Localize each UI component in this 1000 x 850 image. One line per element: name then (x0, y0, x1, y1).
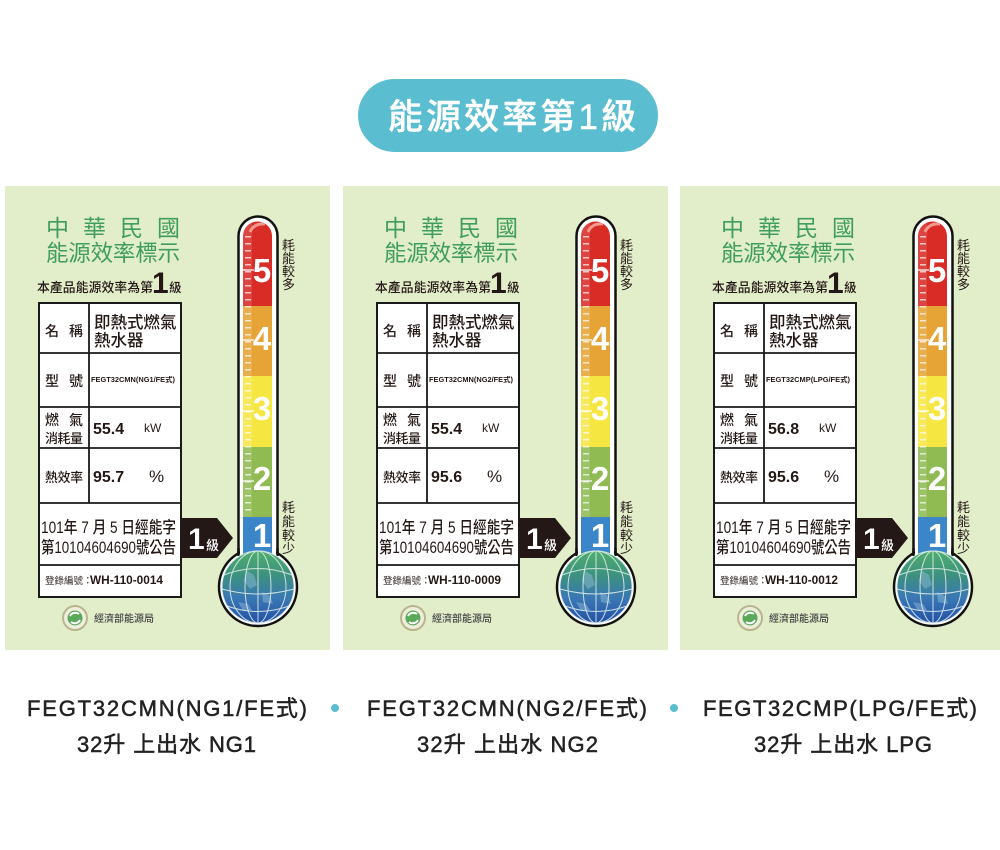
spec table: 熱效率 (45, 470, 83, 485)
grade statement: 1 (152, 267, 169, 300)
spec table: % (149, 467, 164, 486)
label heading: 中 華 民 國 (46, 215, 180, 241)
label heading: 能源效率標示 (721, 241, 855, 266)
issuer logo: 經濟部能源局 (432, 612, 492, 625)
caption: LPG (703, 696, 977, 757)
issuer logo: 經濟部能源局 (94, 612, 154, 625)
scale label: low consumption: 耗 (282, 500, 295, 515)
panel: label NG2 (343, 186, 668, 650)
scale label: low consumption: 較 (957, 528, 970, 543)
grade arrow: 1 (863, 523, 880, 556)
spec table: 101年 7 月 5 日經能字 (716, 518, 851, 537)
spec table: 第10104604690號公告 (41, 538, 176, 557)
thermometer: 4 (591, 320, 610, 357)
label heading: 中 華 民 國 (721, 215, 855, 241)
label heading (721, 215, 855, 266)
spec table: FEGT32CMN(NG2/FE式) (429, 375, 513, 384)
scale label: high consumption (957, 238, 970, 292)
spec table: 熱水器 (769, 331, 818, 350)
spec table: kW (144, 421, 162, 435)
scale label: low consumption: 少 (282, 541, 295, 556)
caption: NG1 (27, 696, 307, 757)
spec table: 101年 7 月 5 日經能字 (41, 518, 176, 537)
spec table: 名 稱 (383, 323, 421, 339)
scale label: high consumption: 耗 (620, 238, 633, 253)
issuer logo (401, 606, 492, 630)
thermometer: 3 (591, 390, 609, 427)
spec table: 燃 氣 (720, 412, 758, 428)
title pill (358, 79, 658, 152)
spec table: 型 號 (720, 373, 758, 389)
scale label: high consumption: 耗 (957, 238, 970, 253)
spec table: 登錄編號： (720, 575, 768, 587)
spec table: 第10104604690號公告 (716, 538, 851, 557)
label heading: 中 華 民 國 (384, 215, 518, 241)
grade statement: 本產品能源效率為第 (375, 280, 491, 295)
spec table: WH-110-0012 (765, 574, 838, 587)
caption: LPG: FEGT32CMP(LPG/FE式) (703, 696, 977, 721)
grade statement: 級 (169, 280, 182, 295)
thermometer: 1 (591, 517, 609, 554)
spec table: % (487, 467, 502, 486)
thermometer (557, 216, 635, 626)
grade arrow (181, 518, 233, 558)
spec table: 95.7 (93, 469, 124, 486)
spec table: WH-110-0009 (428, 574, 502, 587)
spec table: 燃 氣 (383, 412, 421, 428)
scale label: low consumption: 能 (282, 514, 295, 529)
spec table (39, 303, 181, 597)
label heading: 能源效率標示 (46, 241, 180, 266)
scale label: low consumption: 耗 (957, 500, 970, 515)
scale label: high consumption: 多 (957, 277, 970, 292)
grade arrow (519, 518, 571, 558)
spec table: 消耗量 (45, 431, 83, 446)
title pill: 能源效率第1級 (388, 98, 636, 137)
grade arrow: 級 (206, 538, 219, 553)
spec table: % (824, 467, 839, 486)
scale label: low consumption: 較 (620, 528, 633, 543)
grade arrow: 1 (526, 523, 543, 556)
issuer logo (63, 606, 154, 630)
grade arrow: 級 (544, 538, 557, 553)
label heading (384, 215, 518, 266)
grade statement: 1 (490, 267, 507, 300)
spec table: 95.6 (431, 469, 462, 486)
spec table: 95.6 (768, 469, 799, 486)
separator dot (331, 704, 339, 712)
spec table: kW (819, 421, 837, 435)
label heading: 能源效率標示 (384, 241, 518, 266)
spec table: 55.4 (93, 421, 124, 438)
spec table: 燃 氣 (45, 412, 83, 428)
thermometer: 2 (928, 460, 946, 497)
thermometer: 3 (928, 390, 946, 427)
grade arrow (856, 518, 908, 558)
spec table: 熱效率 (720, 470, 758, 485)
separator dot (670, 704, 678, 712)
thermometer: 5 (253, 252, 271, 289)
spec table: 熱水器 (94, 331, 144, 350)
panel: label NG1 (5, 186, 330, 650)
spec table: 即熱式燃氣 (769, 313, 852, 332)
scale label: low consumption: 能 (620, 514, 633, 529)
spec table: 第10104604690號公告 (379, 538, 514, 557)
thermometer: 1 (253, 517, 271, 554)
grade statement: 級 (507, 280, 520, 295)
issuer logo: 經濟部能源局 (769, 612, 829, 625)
scale label: low consumption: 較 (282, 528, 295, 543)
thermometer (894, 216, 972, 626)
thermometer: 5 (591, 252, 609, 289)
scale label: low consumption: 少 (620, 541, 633, 556)
scale label: high consumption: 能 (620, 251, 633, 266)
caption: NG1: 32升 上出水 NG1 (77, 732, 256, 757)
grade statement: 1 (827, 267, 844, 300)
grade arrow: 級 (881, 538, 894, 553)
spec table: WH-110-0014 (90, 574, 164, 587)
thermometer: 3 (253, 390, 271, 427)
thermometer: 1 (928, 517, 946, 554)
scale label: low consumption: 少 (957, 541, 970, 556)
spec table: 消耗量 (720, 431, 758, 446)
label heading (46, 215, 180, 266)
spec table: 熱效率 (383, 470, 421, 485)
scale label: high consumption: 較 (620, 264, 633, 279)
scale label: high consumption: 多 (282, 277, 295, 292)
scale label: high consumption: 耗 (282, 238, 295, 253)
caption: NG1: FEGT32CMN(NG1/FE式) (27, 696, 307, 721)
spec table (714, 303, 856, 597)
caption: NG2 (367, 696, 647, 757)
scale label: low consumption: 能 (957, 514, 970, 529)
scale label: low consumption (282, 500, 295, 556)
spec table: 型 號 (383, 373, 421, 389)
scale label: high consumption (620, 238, 633, 292)
spec table: kW (482, 421, 500, 435)
spec table: 101年 7 月 5 日經能字 (379, 518, 514, 537)
thermometer: 4 (253, 320, 272, 357)
spec table: 即熱式燃氣 (94, 313, 176, 332)
scale label: high consumption: 較 (282, 264, 295, 279)
scale label: low consumption (620, 500, 633, 556)
spec table: 消耗量 (383, 431, 421, 446)
grade arrow: 1 (188, 523, 205, 556)
grade statement: 本產品能源效率為第 (712, 280, 828, 295)
thermometer (219, 216, 297, 626)
grade statement: 級 (844, 280, 857, 295)
scale label: high consumption: 多 (620, 277, 633, 292)
thermometer: 2 (591, 460, 609, 497)
scale label: high consumption (282, 238, 295, 292)
spec table: FEGT32CMN(NG1/FE式) (91, 375, 175, 384)
spec table: 名 稱 (720, 323, 758, 339)
spec table: 即熱式燃氣 (432, 313, 514, 332)
grade statement (375, 267, 520, 300)
spec table: FEGT32CMP(LPG/FE式) (766, 375, 850, 384)
grade statement (37, 267, 182, 300)
spec table: 型 號 (45, 373, 83, 389)
caption: LPG: 32升 上出水 LPG (754, 732, 932, 757)
spec table: 登錄編號： (45, 575, 93, 587)
spec table: 56.8 (768, 421, 799, 438)
spec table: 名 稱 (45, 323, 83, 339)
scale label: low consumption (957, 500, 970, 556)
caption: NG2: 32升 上出水 NG2 (417, 732, 598, 757)
scale label: high consumption: 較 (957, 264, 970, 279)
grade statement: 本產品能源效率為第 (37, 280, 153, 295)
scale label: low consumption: 耗 (620, 500, 633, 515)
issuer logo (738, 606, 829, 630)
thermometer: 4 (928, 320, 947, 357)
panel: label LPG (680, 186, 1000, 650)
caption: NG2: FEGT32CMN(NG2/FE式) (367, 696, 647, 721)
grade statement (712, 267, 857, 300)
spec table: 熱水器 (432, 331, 482, 350)
scale label: high consumption: 能 (282, 251, 295, 266)
scale label: high consumption: 能 (957, 251, 970, 266)
spec table: 55.4 (431, 421, 462, 438)
thermometer: 2 (253, 460, 271, 497)
thermometer: 5 (928, 252, 946, 289)
spec table (377, 303, 519, 597)
spec table: 登錄編號： (383, 575, 431, 587)
